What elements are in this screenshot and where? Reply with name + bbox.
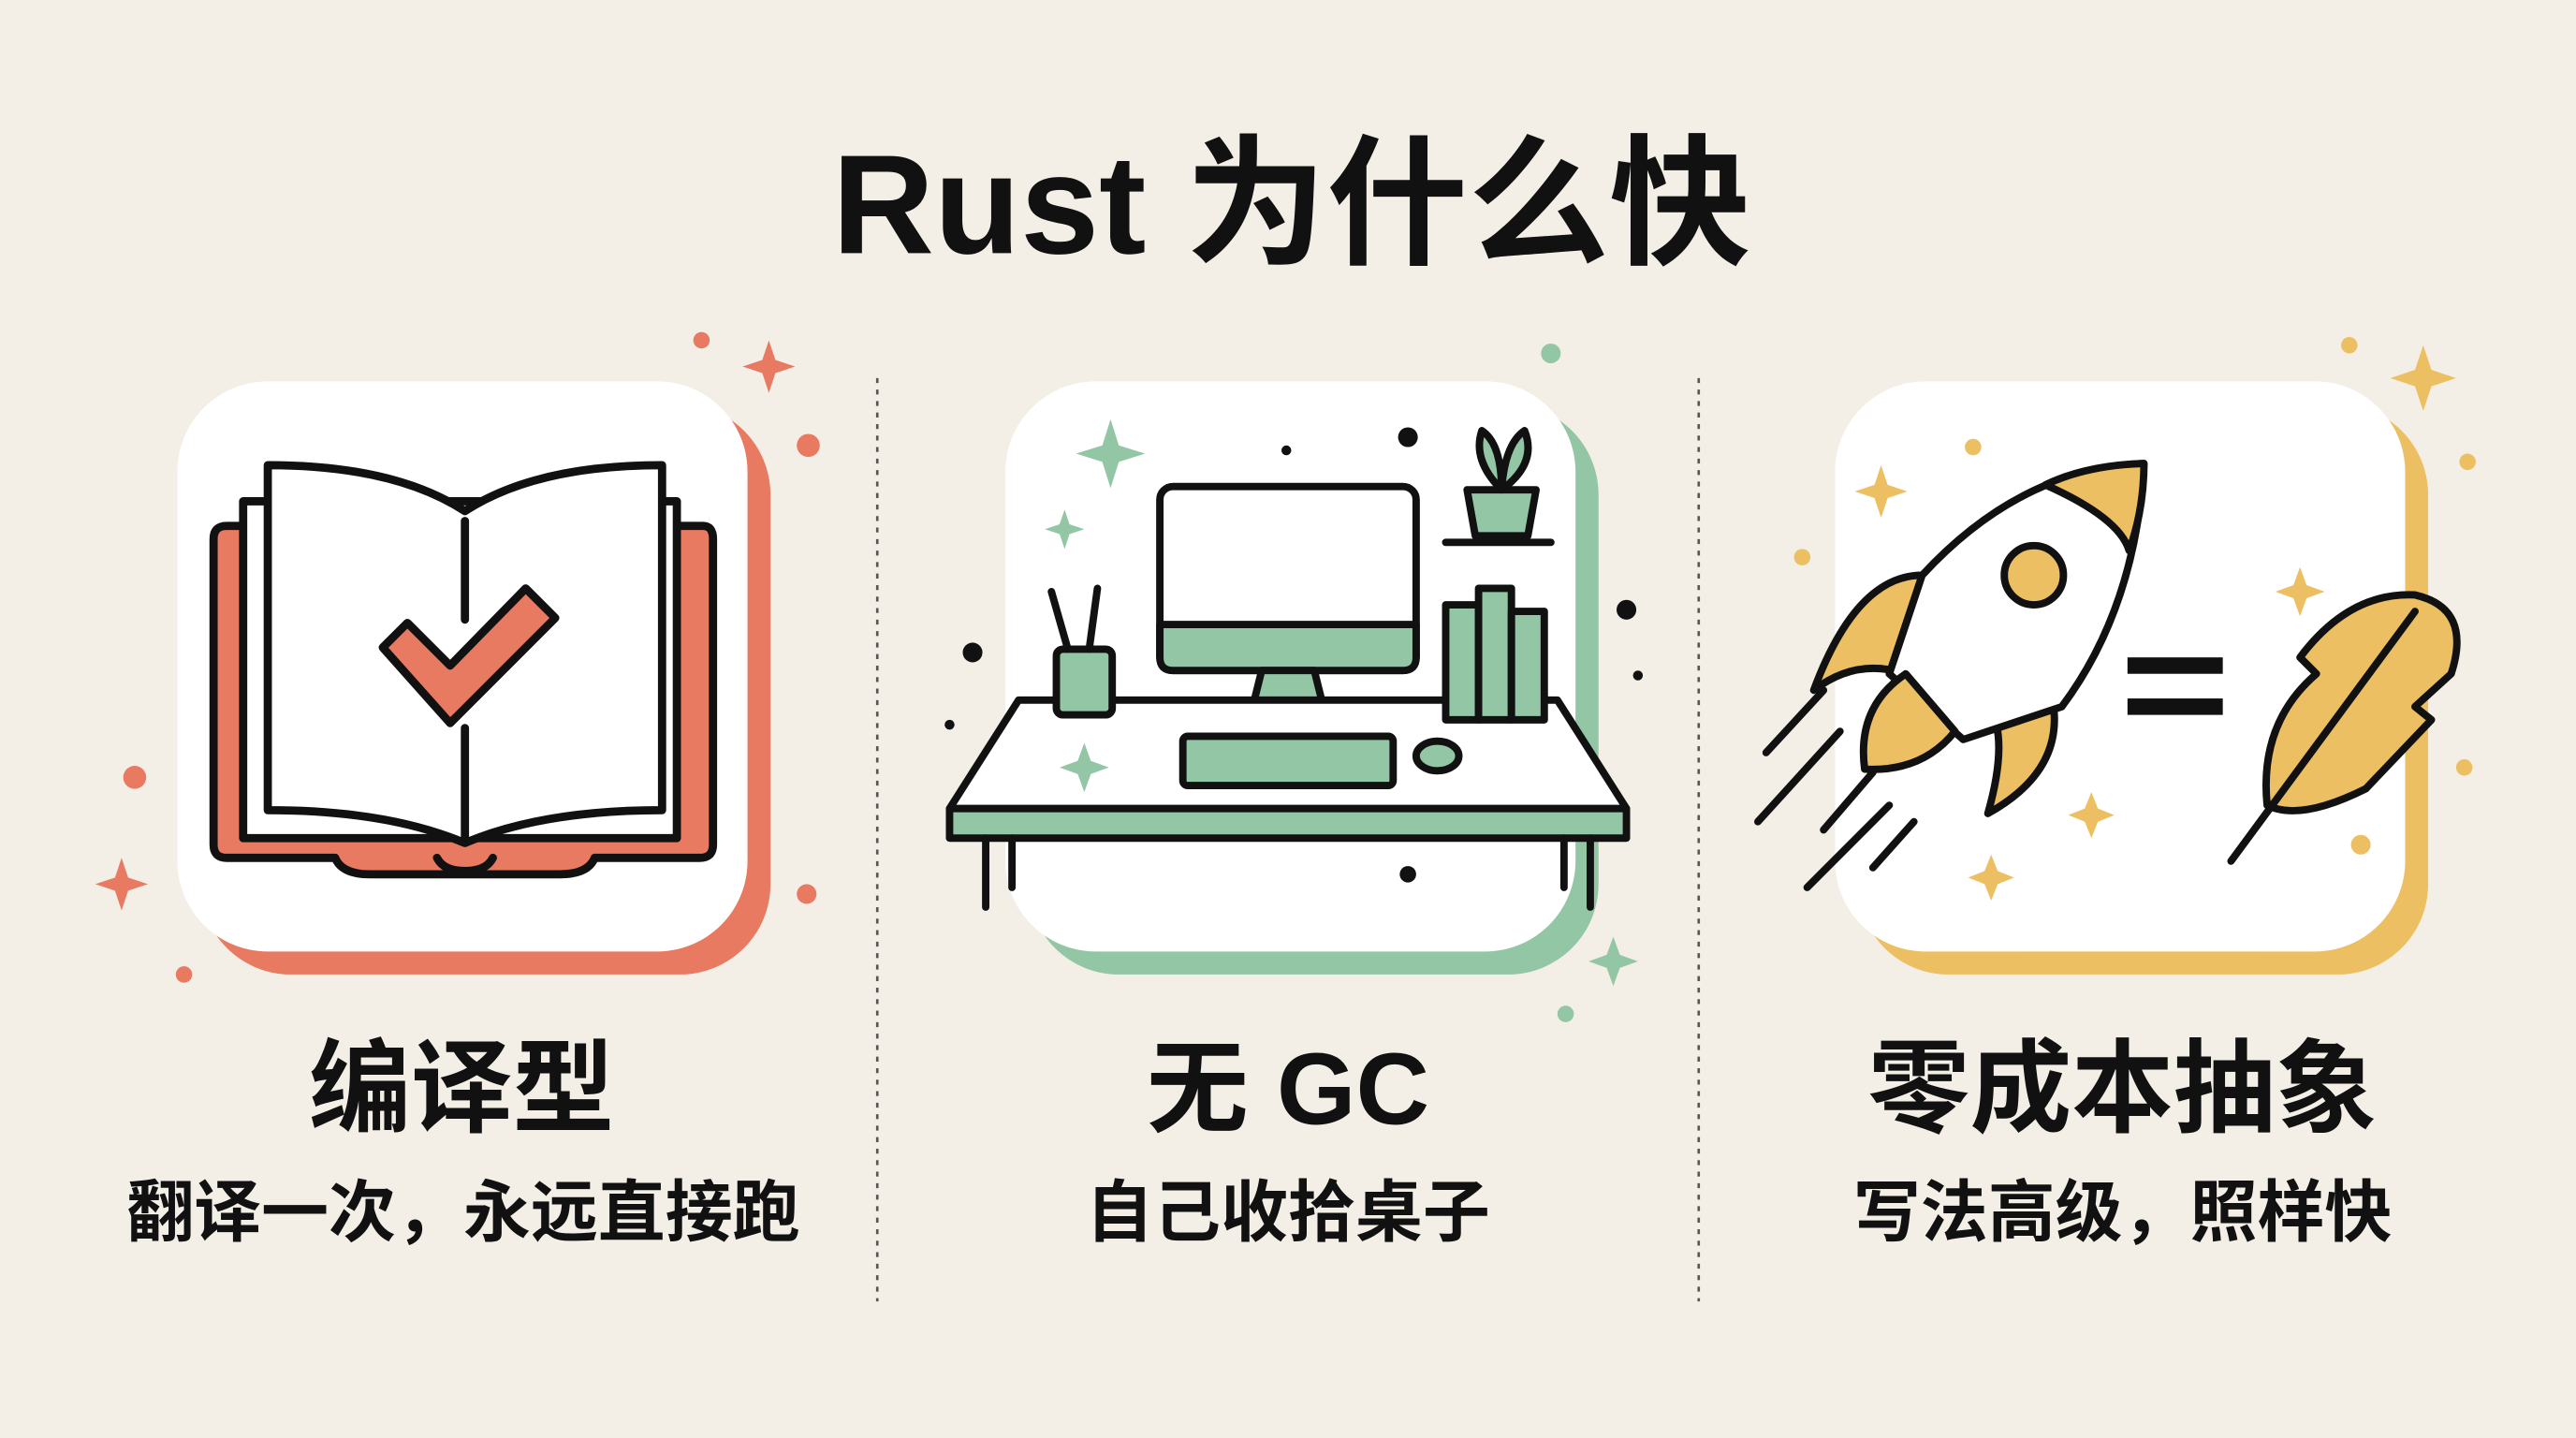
icon: equals [2128, 657, 2223, 715]
card shadow [200, 404, 770, 975]
panel: compiled [95, 332, 820, 1251]
icon: rocket [1758, 463, 2144, 888]
panel: no GC [944, 344, 1643, 1251]
icon: feather [2231, 594, 2457, 861]
subtitle: 写法高级，照样快 [1853, 1176, 2392, 1251]
card shadow [1858, 404, 2428, 975]
heading: 编译型 [309, 1033, 614, 1147]
card shadow [1029, 404, 1599, 975]
subtitle: 翻译一次，永远直接跑 [126, 1176, 800, 1251]
icon: book [213, 465, 713, 874]
heading: 零成本抽象 [1868, 1033, 2378, 1147]
panel: zero-cost abstraction [1758, 337, 2476, 1251]
heading: 无 GC [1147, 1033, 1429, 1147]
sparkles [1045, 344, 1638, 1022]
title: Rust 为什么快 [832, 125, 1750, 283]
icon: desk [949, 431, 1627, 907]
card [178, 381, 748, 951]
sparkles [95, 332, 820, 983]
card [1005, 381, 1575, 951]
sparkles [1794, 337, 2476, 901]
subtitle: 自己收拾桌子 [1086, 1176, 1490, 1251]
card [1835, 381, 2405, 951]
